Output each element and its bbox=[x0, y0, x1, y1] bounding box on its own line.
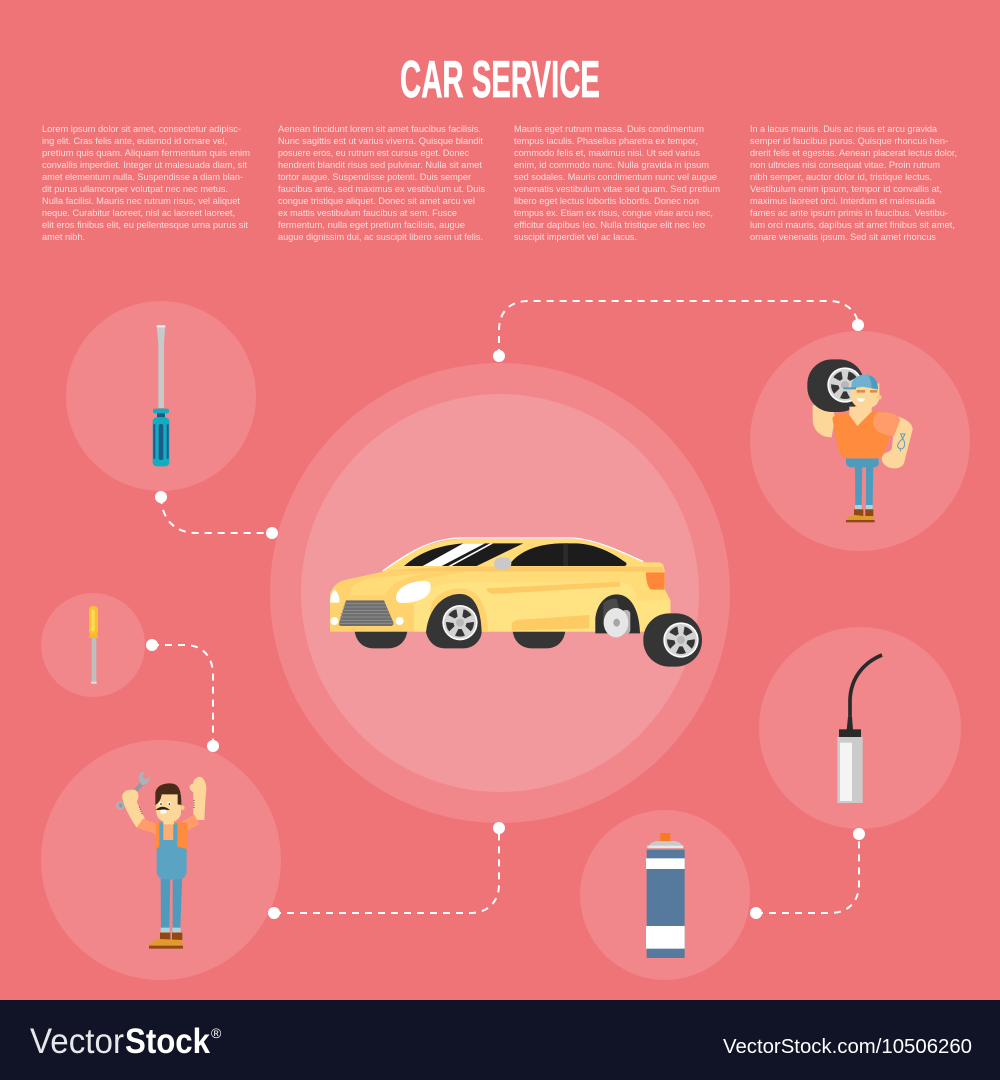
sill and door shades bbox=[487, 582, 620, 594]
center circle outer bbox=[270, 363, 730, 823]
front wheel bbox=[426, 594, 482, 648]
footer logo: ® bbox=[211, 1025, 222, 1041]
headlights and grille bbox=[396, 581, 431, 603]
text column 2: Nunc sagittis est ut varius viverra. Quisque blandit bbox=[278, 136, 484, 146]
text column 4: non ultricies nisi consequat vitae. Proin rutrum bbox=[750, 160, 940, 170]
side window bbox=[508, 543, 627, 566]
icon: small screwdriver bbox=[89, 606, 98, 684]
arm motion ticks bbox=[139, 800, 194, 815]
text column 3: venenatis vestibulum vitae sed quam. Sed pretium bbox=[514, 184, 720, 194]
windscreen bbox=[404, 543, 523, 566]
footer id: VectorStock.com/10506260 bbox=[723, 1036, 972, 1058]
text column 3: sed sodales. Mauris condimentum nunc vel augue bbox=[514, 172, 717, 182]
neck and head bbox=[163, 815, 174, 824]
icon: sealant tube bbox=[837, 655, 882, 803]
text column 4: drerit felis et egestas. Aenean placerat lectus dolor, bbox=[750, 148, 957, 158]
neck bbox=[849, 407, 872, 426]
title: CAR SERVICE bbox=[400, 51, 600, 109]
text column 2: posuere eros, eu rutrum est cursus eget. Donec bbox=[278, 148, 469, 158]
text column 3: tempus ex. Etiam ex risus, congue vitae arcu nec, bbox=[514, 208, 713, 218]
car bbox=[330, 538, 702, 667]
circle: screwdriver bbox=[66, 301, 256, 491]
text column 1: elit eros finibus elit, eu pellentesque urna purus sit bbox=[42, 220, 249, 230]
icon: spray can bbox=[646, 833, 685, 958]
footer logo: Vector bbox=[30, 1022, 124, 1061]
mirror bbox=[494, 557, 511, 570]
rear arch with exposed hub bbox=[595, 594, 640, 633]
sleeves bbox=[137, 818, 160, 835]
center circle inner bbox=[301, 394, 699, 792]
sleeve bbox=[873, 412, 900, 436]
text column 3: suscipit imperdiet vel ac lacus. bbox=[514, 232, 637, 242]
connector dots bbox=[146, 319, 865, 919]
text column 4: nibh semper, auctor dolor id, tristique lectus. bbox=[750, 172, 932, 182]
shirt bbox=[832, 411, 900, 458]
text column 1: amet elementum nulla. Suspendisse a diam blan- bbox=[42, 172, 243, 182]
arms bbox=[122, 790, 145, 828]
text column 3: Mauris eget rutrum massa. Duis condimentum bbox=[514, 124, 704, 134]
text column 1: convallis imperdiet. Integer ut malesuada diam, sit bbox=[42, 160, 247, 170]
car body bbox=[330, 539, 670, 632]
tail light bbox=[646, 572, 665, 590]
head bbox=[851, 383, 879, 409]
text column 3: efficitur dapibus leo. Nulla tristique elit nec leo bbox=[514, 220, 705, 230]
body side light panel bbox=[414, 582, 670, 632]
text column 1: dit purus ullamcorper volutpat nec nec metus. bbox=[42, 184, 228, 194]
legs bbox=[161, 875, 182, 928]
footer bar bbox=[0, 1000, 1000, 1080]
mechanic bbox=[117, 772, 206, 949]
legs bbox=[846, 458, 879, 467]
footer logo: Stock bbox=[125, 1022, 210, 1061]
text column 3: tempus iaculis. Phasellus pharetra ex tempor, bbox=[514, 136, 698, 146]
text column 4: In a lacus mauris. Duis ac risus et arcu gravida bbox=[750, 124, 937, 134]
tire man bbox=[807, 359, 913, 522]
text column 2: ex mattis vestibulum faucibus at sem. Fusce bbox=[278, 208, 457, 218]
dashed connectors bbox=[152, 301, 859, 913]
text column 2: fermentum, nulla eget pretium facilisis, augue bbox=[278, 220, 465, 230]
boots bbox=[160, 933, 182, 940]
text column 2: augue dignissim dui, ac suscipit libero sem ut felis. bbox=[278, 232, 483, 242]
text column 3: libero eget lectus lobortis lobortis. Donec non bbox=[514, 196, 699, 206]
circle: tire man bbox=[750, 331, 970, 551]
hair bbox=[155, 783, 181, 805]
text column 4: lum orci mauris, dapibus sit amet finibus sit amet, bbox=[750, 220, 955, 230]
tattoo bbox=[898, 434, 905, 451]
text column 2: Aenean tincidunt lorem sit amet faucibus facilisis. bbox=[278, 124, 481, 134]
back arm bbox=[813, 405, 835, 437]
text column 1: Nulla facilisi. Mauris nec rutrum risus, vel aliquet bbox=[42, 196, 240, 206]
hood highlight bbox=[350, 572, 430, 596]
text column 1: pretium quis quam. Aliquam fermentum quis enim bbox=[42, 148, 250, 158]
text column 4 bbox=[750, 124, 957, 242]
circle: sealant tube bbox=[759, 627, 961, 829]
text column 2: hendrerit blandit risus sed pulvinar. Nulla sit amet bbox=[278, 160, 483, 170]
text column 2: tortor augue. Suspendisse potenti. Duis semper bbox=[278, 172, 471, 182]
text column 3: enim, id commodo nunc. Nulla gravida in ipsum bbox=[514, 160, 709, 170]
front bumper shade bbox=[330, 572, 467, 632]
loose wheel bbox=[643, 613, 702, 667]
icon: screwdriver bbox=[153, 325, 169, 466]
overalls bbox=[157, 822, 187, 879]
text column 2: congue tristique aliquet. Donec sit amet arcu vel bbox=[278, 196, 475, 206]
circle: mechanic bbox=[41, 740, 281, 980]
front arm bbox=[882, 417, 913, 468]
cap bbox=[851, 374, 878, 389]
text column 1: neque. Curabitur laoreet, nisl ac laoreet laoreet, bbox=[42, 208, 235, 218]
text column 1 bbox=[42, 124, 250, 242]
text column 2 bbox=[278, 124, 486, 242]
text column 3 bbox=[514, 124, 720, 242]
text column 4: semper id faucibus purus. Quisque rhoncus hen- bbox=[750, 136, 948, 146]
shirt bbox=[156, 822, 188, 849]
text column 2: faucibus ante, sed maximus ex vestibulum ut. Duis bbox=[278, 184, 486, 194]
text column 4: Vestibulum enim ipsum, tempor id convallis at, bbox=[750, 184, 942, 194]
footer logo bbox=[30, 1022, 222, 1061]
text column 1: Lorem ipsum dolor sit amet, consectetur adipisc- bbox=[42, 124, 241, 134]
roof line bbox=[383, 538, 643, 571]
text column 4: fames ac ante ipsum primis in faucibus. Vestibu- bbox=[750, 208, 948, 218]
text column 3: commodo felis et, maximus nisi. Ut sed varius bbox=[514, 148, 701, 158]
tire on shoulder bbox=[807, 359, 864, 412]
circle: spray can bbox=[580, 810, 750, 980]
text column 4: maximus laoreet orci. Interdum et malesuada bbox=[750, 196, 935, 206]
text column 1: ing elit. Cras felis ante, euismod id ornare vel, bbox=[42, 136, 227, 146]
circle: small screwdriver bbox=[41, 593, 145, 697]
text column 1: amet nibh. bbox=[42, 232, 85, 242]
boots bbox=[854, 509, 873, 516]
text column 4: ornare venenatis ipsum. Sed sit amet rhoncus bbox=[750, 232, 937, 242]
front arch shade bbox=[430, 588, 488, 632]
under tyres bbox=[355, 631, 407, 648]
face details bbox=[159, 802, 162, 805]
wrench bbox=[120, 780, 146, 807]
